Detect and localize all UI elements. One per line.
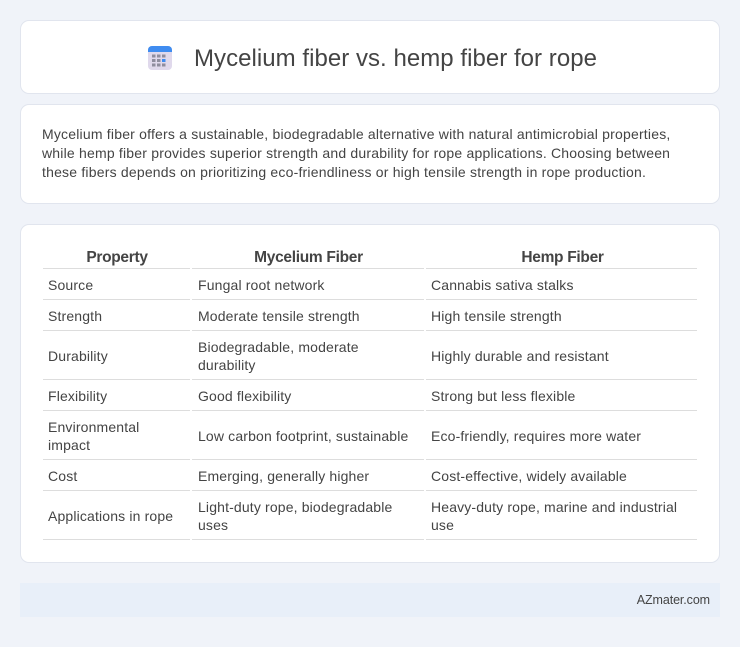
table header: Hemp Fiber xyxy=(521,249,604,266)
panel: summary xyxy=(20,104,720,204)
summary text: Mycelium fiber offers a sustainable, biodegradable alternative with natural antimicrobial properties, xyxy=(42,126,670,142)
row: environmental impact xyxy=(48,419,641,453)
panel: comparison table xyxy=(20,224,720,563)
row: source: Source xyxy=(48,277,93,293)
row: durability: Durability xyxy=(48,348,108,364)
row: durability xyxy=(48,339,609,373)
row: durability: Highly durable and resistant xyxy=(431,348,609,364)
row: strength xyxy=(48,308,562,324)
row: cost: Emerging, generally higher xyxy=(198,468,369,484)
row: durability: Biodegradable, moderate xyxy=(198,339,359,355)
row: cost: Cost xyxy=(48,468,77,484)
footer credit: AZmater.com xyxy=(637,593,710,607)
row: applications in rope: Heavy-duty rope, marine and industrial xyxy=(431,499,677,515)
table header: Mycelium Fiber xyxy=(254,249,363,266)
row: cost: Cost-effective, widely available xyxy=(431,468,627,484)
table header: Property xyxy=(86,249,148,266)
row: environmental impact: impact xyxy=(48,437,90,453)
row: flexibility xyxy=(48,388,575,404)
row: strength: High tensile strength xyxy=(431,308,562,324)
row: strength: Moderate tensile strength xyxy=(198,308,360,324)
row: applications in rope: Applications in rope xyxy=(48,508,173,524)
row: source: Fungal root network xyxy=(198,277,325,293)
row: flexibility: Flexibility xyxy=(48,388,107,404)
row: environmental impact: Low carbon footprint, sustainable xyxy=(198,428,408,444)
row: strength: Strength xyxy=(48,308,102,324)
footer bar xyxy=(20,583,720,617)
row: flexibility: Strong but less flexible xyxy=(431,388,575,404)
row: cost xyxy=(48,468,627,484)
icon: calendar xyxy=(148,46,172,70)
summary text: these fibers depends on prioritizing eco-friendliness or high tensile strength in rope production. xyxy=(42,164,646,180)
row: environmental impact: Eco-friendly, requires more water xyxy=(431,428,641,444)
table header xyxy=(86,249,604,266)
row: applications in rope xyxy=(48,499,677,533)
row: applications in rope: uses xyxy=(198,517,228,533)
row: flexibility: Good flexibility xyxy=(198,388,291,404)
row: applications in rope: use xyxy=(431,517,454,533)
summary text xyxy=(42,126,670,180)
title: Mycelium fiber vs. hemp fiber for rope xyxy=(194,45,597,72)
summary text: while hemp fiber provides superior strength and durability for rope applications. Choosing between xyxy=(42,145,670,161)
panel: title card xyxy=(20,20,720,94)
row: source: Cannabis sativa stalks xyxy=(431,277,574,293)
row: environmental impact: Environmental xyxy=(48,419,139,435)
row: source xyxy=(48,277,574,293)
row: durability: durability xyxy=(198,357,256,373)
row: applications in rope: Light-duty rope, biodegradable xyxy=(198,499,392,515)
